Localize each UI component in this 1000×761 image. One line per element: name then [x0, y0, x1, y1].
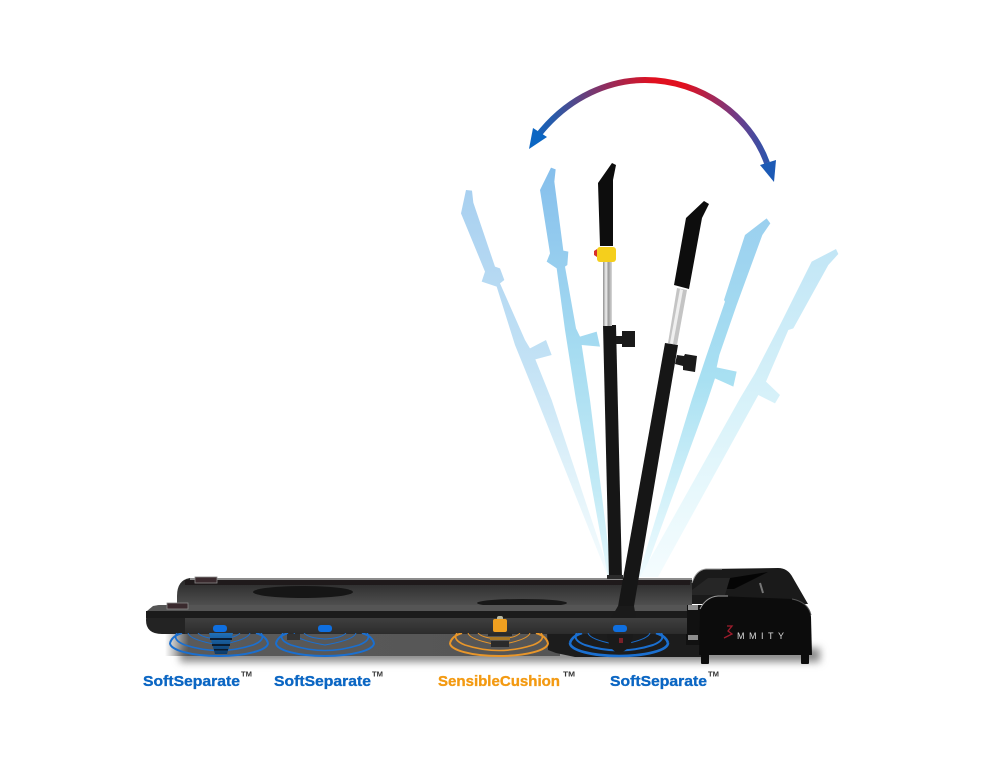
cone foot 1: [209, 625, 233, 654]
rings blue 2: [276, 633, 374, 656]
label: SoftSeparate 3: TM: [708, 672, 719, 678]
faint top label: [760, 583, 763, 593]
yellow collar: [597, 247, 616, 262]
grip: [674, 201, 709, 289]
rings blue 3: [570, 633, 668, 656]
ghost handlebar left: [540, 168, 612, 577]
silver tube: [603, 262, 612, 326]
label: SoftSeparate 1: SoftSeparate: [143, 673, 240, 690]
knob: [616, 331, 635, 347]
dark belt reflections: [253, 586, 353, 598]
ghost handlebar positions: [461, 168, 838, 577]
dark rear base: [547, 633, 705, 657]
recess on top: [725, 572, 768, 589]
ghost handlebar far left: [461, 190, 611, 577]
floor under deck: [165, 633, 560, 656]
blue puck 3: [613, 625, 627, 632]
label: SoftSeparate 1: TM: [241, 672, 252, 678]
feet: [701, 654, 709, 664]
rear foot: [607, 634, 633, 652]
silver tube: [668, 288, 687, 345]
grip: [598, 163, 616, 246]
lower tube: [603, 325, 622, 578]
knob: [675, 354, 697, 372]
label: SoftSeparate 2: TM: [372, 672, 383, 678]
curved double-headed arrow: [529, 80, 776, 182]
shock rings: [170, 633, 668, 656]
label: SensibleCushion: SensibleCushion: [438, 673, 560, 690]
front housing: [699, 596, 812, 655]
label: SensibleCushion: TM: [563, 672, 575, 678]
treadmill base: [146, 577, 820, 662]
brand name: MMITY: [737, 631, 784, 641]
far display: [195, 577, 217, 583]
rear connector: [686, 605, 702, 645]
base collar: [611, 606, 636, 618]
near side rail: [146, 605, 687, 634]
upright handlebar, near left: [594, 163, 635, 579]
rings orange: [450, 633, 548, 656]
orange cushion: [488, 616, 512, 647]
near display: [167, 603, 188, 609]
label: SoftSeparate 2: SoftSeparate: [274, 673, 371, 690]
ghost handlebar far right: [640, 249, 838, 577]
tilted handlebar, near right: [611, 201, 709, 618]
treadmill infographic: [143, 77, 838, 690]
rings blue 1: [170, 633, 268, 656]
motor housing: [692, 568, 812, 664]
red logo mark: [724, 626, 732, 638]
lower tube: [617, 343, 678, 612]
soft floor shadow: [180, 648, 820, 662]
rear housing: [692, 568, 808, 604]
ghost handlebar right: [638, 218, 770, 577]
label: SoftSeparate 3: SoftSeparate: [610, 673, 707, 690]
small block and puck 2: [287, 625, 332, 640]
far rail and deck: [177, 578, 692, 606]
